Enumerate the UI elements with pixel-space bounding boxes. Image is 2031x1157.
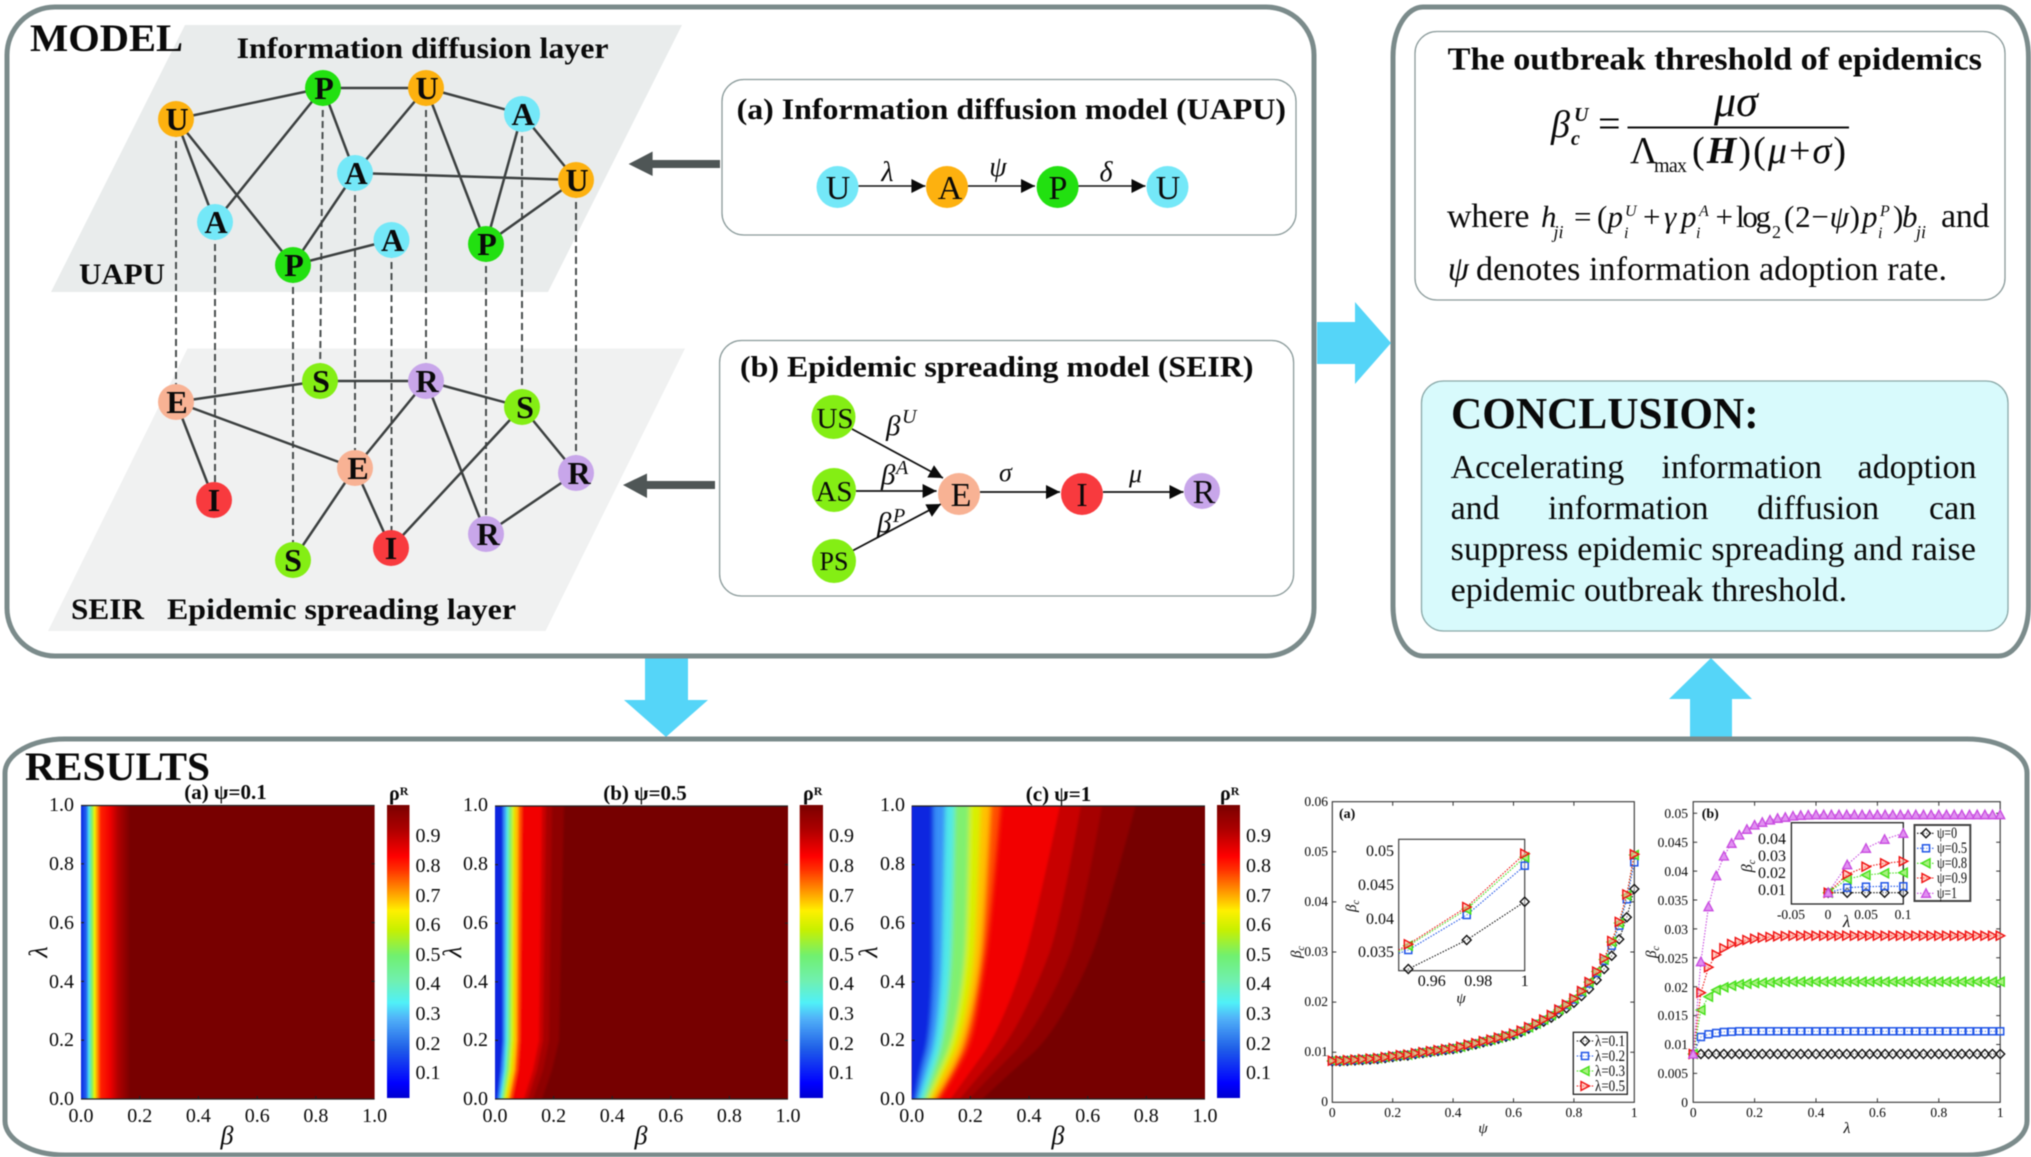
inset chart: lambda 0 to 0.1: 0.05 bbox=[1854, 907, 1878, 922]
where line: p bbox=[1679, 199, 1696, 234]
colorbar: psi 0.1: 0.1 bbox=[416, 1062, 440, 1084]
nodes: epidemic layer: S bbox=[284, 542, 302, 578]
box: UAPU model bbox=[722, 80, 1296, 235]
where line: p bbox=[1606, 199, 1623, 234]
heading: information diffusion layer: Information diffusion layer bbox=[237, 32, 609, 65]
series: psi 0.5 bbox=[1693, 1031, 2000, 1054]
colorbar: psi 0.1: R bbox=[400, 784, 409, 798]
heatmap: psi 0.1: 0.6 bbox=[49, 912, 74, 934]
inset chart: lambda 0 to 0.1: 0.03 bbox=[1758, 848, 1786, 865]
inset chart: psi 0.95 to 1: ψ bbox=[1456, 991, 1466, 1007]
colorbar: psi 0.5: 0.6 bbox=[829, 914, 854, 936]
conclusion body: suppress epidemic spreading and raise bbox=[1451, 531, 1976, 568]
colorbar: psi 1: 0.4 bbox=[1246, 973, 1271, 995]
line chart: threshold vs lambda: 0.2 bbox=[1746, 1105, 1763, 1120]
where line: p bbox=[1860, 199, 1878, 234]
SEIR state diagram bbox=[812, 395, 1220, 583]
colorbar: psi 0.5: 0.2 bbox=[829, 1033, 854, 1055]
SEIR state diagram: A bbox=[894, 457, 909, 479]
inset chart: psi 0.95 to 1: 1 bbox=[1521, 973, 1529, 990]
SEIR state diagram: AS bbox=[815, 476, 853, 508]
where line: 2 bbox=[1772, 222, 1781, 242]
line chart: threshold vs lambda: 0.015 bbox=[1658, 1008, 1688, 1023]
where line: ji bbox=[1552, 222, 1564, 242]
heatmap: psi 1: 0.2 bbox=[880, 1029, 905, 1051]
conclusion body: information bbox=[1662, 449, 1822, 486]
heatmap: psi 1: (c) ψ=1 bbox=[1026, 782, 1091, 806]
heatmap: psi 1: 0.4 bbox=[880, 971, 905, 993]
legend: psi series: ψ=0.9 bbox=[1937, 870, 1967, 887]
nodes: information layer: A bbox=[204, 204, 228, 240]
panel: results bbox=[5, 739, 2027, 1155]
colorbar: psi 1 bbox=[1217, 783, 1271, 1098]
where line: = bbox=[1574, 199, 1591, 234]
line chart: threshold vs lambda: 0.01 bbox=[1664, 1037, 1688, 1052]
SEIR state diagram: β bbox=[880, 459, 896, 491]
colorbar: psi 0.1: 0.5 bbox=[416, 944, 440, 966]
UAPU state diagram: δ bbox=[1099, 157, 1113, 188]
threshold formula: Λ bbox=[1630, 130, 1658, 172]
inset chart: psi 0.95 to 1 bbox=[1344, 839, 1529, 1007]
heatmap: psi 0.5: 0.6 bbox=[463, 912, 488, 934]
heatmap: psi 0.5: 0.8 bbox=[463, 853, 488, 875]
colorbar: psi 1: 0.2 bbox=[1246, 1033, 1271, 1055]
heatmap: psi 1: 0.6 bbox=[880, 912, 905, 934]
nodes: epidemic layer: R bbox=[415, 363, 439, 399]
inset chart: lambda 0 to 0.1: β bbox=[1739, 864, 1756, 872]
heatmap: psi 0.1: 0.0 bbox=[68, 1105, 94, 1127]
heatmap: psi 1: λ bbox=[854, 946, 883, 959]
UAPU state diagram bbox=[816, 152, 1188, 208]
UAPU state diagram: A bbox=[938, 170, 963, 207]
heatmap: psi 0.1: 1.0 bbox=[362, 1105, 387, 1127]
psi definition: ψ bbox=[1448, 251, 1470, 288]
nodes: epidemic layer: R bbox=[476, 516, 500, 552]
conclusion body: epidemic outbreak threshold. bbox=[1451, 572, 1847, 609]
inset chart: lambda 0 to 0.1: 0.02 bbox=[1758, 865, 1786, 882]
line chart: threshold vs psi: 0 bbox=[1321, 1094, 1328, 1109]
line chart: threshold vs lambda: 0.04 bbox=[1664, 864, 1688, 879]
line chart: threshold vs psi: 0.03 bbox=[1304, 944, 1328, 959]
nodes: information layer: P bbox=[284, 247, 304, 283]
heatmap: psi 0.5: 0.4 bbox=[600, 1105, 625, 1127]
colorbar: psi 0.1: 0.3 bbox=[416, 1003, 440, 1025]
line chart: threshold vs lambda: c bbox=[1651, 945, 1662, 950]
SEIR state diagram: U bbox=[902, 406, 918, 428]
heading: results: RESULTS bbox=[25, 744, 210, 789]
inset chart: lambda 0 to 0.1 bbox=[1739, 823, 1911, 931]
legend: lambda series: λ=0.5 bbox=[1595, 1078, 1625, 1095]
threshold formula: β bbox=[1550, 104, 1570, 146]
series: psi 1 bbox=[1693, 815, 2000, 1054]
heatmap: psi 0.5: 0.4 bbox=[463, 971, 488, 993]
line chart: threshold vs psi: 0.2 bbox=[1384, 1105, 1401, 1120]
colorbar: psi 1: 0.3 bbox=[1246, 1003, 1271, 1025]
colorbar: psi 1: 0.5 bbox=[1246, 944, 1271, 966]
line chart: threshold vs lambda: 0.025 bbox=[1658, 951, 1688, 966]
heading: model: MODEL bbox=[30, 17, 183, 60]
heatmap: psi 1: 0.2 bbox=[958, 1105, 983, 1127]
inset chart: lambda 0 to 0.1: 0.1 bbox=[1895, 907, 1911, 922]
threshold heading: The outbreak threshold of epidemics bbox=[1448, 40, 1982, 76]
colorbar: psi 0.5: ρ bbox=[803, 783, 814, 805]
label: SEIR: SEIR bbox=[71, 593, 144, 626]
SEIR state diagram: β bbox=[885, 410, 901, 442]
colorbar: psi 0.1: 0.8 bbox=[416, 855, 440, 877]
panel: threshold and conclusion bbox=[1393, 7, 2028, 656]
series: lambda 0.5 bbox=[1332, 854, 1634, 1061]
where line: A bbox=[1698, 203, 1709, 220]
line chart: threshold vs psi: 0.05 bbox=[1304, 844, 1328, 859]
heatmap: psi 0.1: 0.4 bbox=[49, 971, 74, 993]
UAPU state diagram: U bbox=[1156, 170, 1180, 207]
nodes: information layer: A bbox=[511, 96, 535, 132]
line chart: threshold vs lambda bbox=[1644, 802, 2004, 1137]
arrow: SEIR model to layer bbox=[623, 474, 715, 498]
nodes: information layer: A bbox=[381, 222, 404, 258]
where line: i bbox=[1878, 225, 1882, 242]
where line: (2−ψ) bbox=[1784, 199, 1860, 234]
heatmap: psi 0.1: 0.6 bbox=[245, 1105, 270, 1127]
line chart: threshold vs psi: 0.01 bbox=[1304, 1044, 1328, 1059]
where line: + bbox=[1716, 199, 1733, 234]
colorbar: psi 0.5: 0.9 bbox=[829, 825, 854, 847]
nodes: epidemic layer: E bbox=[166, 384, 188, 420]
legend: lambda series: λ=0.2 bbox=[1595, 1048, 1625, 1065]
heatmap: psi 0.1 bbox=[24, 780, 387, 1150]
SEIR state diagram: PS bbox=[820, 547, 848, 576]
line chart: threshold vs lambda: 0.03 bbox=[1664, 922, 1688, 937]
box heading: (b) Epidemic spreading model (SEIR) bbox=[740, 351, 1254, 384]
line chart: threshold vs lambda: 0.035 bbox=[1658, 893, 1688, 908]
nodes: information layer bbox=[158, 70, 594, 283]
heatmap: psi 0.1: (a) ψ=0.1 bbox=[184, 780, 267, 804]
heatmap: psi 1: 0.0 bbox=[880, 1088, 905, 1110]
conclusion body: and bbox=[1451, 490, 1500, 527]
conclusion body: diffusion bbox=[1757, 490, 1879, 527]
threshold formula: max bbox=[1654, 155, 1687, 177]
line chart: threshold vs psi: 0 bbox=[1329, 1105, 1336, 1120]
line chart: threshold vs psi: 0.02 bbox=[1304, 994, 1328, 1009]
threshold formula: μσ bbox=[1713, 77, 1760, 126]
threshold formula: U bbox=[1574, 104, 1590, 126]
inset chart: psi 0.95 to 1: 0.05 bbox=[1366, 843, 1394, 860]
heatmap: psi 1: 0.8 bbox=[1134, 1105, 1159, 1127]
colorbar: psi 0.1: 0.2 bbox=[416, 1033, 440, 1055]
conclusion body: can bbox=[1929, 490, 1976, 527]
heading: epidemic spreading layer: Epidemic spreading layer bbox=[167, 593, 516, 626]
colorbar: psi 0.1 bbox=[387, 783, 440, 1098]
line chart: threshold vs psi: β bbox=[1289, 950, 1305, 958]
line chart: threshold vs lambda: 0.4 bbox=[1808, 1105, 1825, 1120]
UAPU state diagram: U bbox=[826, 170, 850, 207]
line chart: threshold vs lambda: 1 bbox=[1997, 1105, 2004, 1120]
UAPU state diagram: λ bbox=[880, 157, 894, 188]
line chart: threshold vs psi: c bbox=[1296, 945, 1307, 950]
box: conclusion bbox=[1422, 381, 2008, 631]
line chart: threshold vs lambda: 0.02 bbox=[1664, 980, 1688, 995]
series: lambda 0.3 bbox=[1332, 855, 1634, 1061]
where line: and bbox=[1941, 198, 1990, 235]
where line: ) bbox=[1893, 199, 1903, 234]
threshold formula: = bbox=[1598, 101, 1621, 146]
line chart: threshold vs lambda: 0.8 bbox=[1930, 1105, 1947, 1120]
UAPU state diagram: P bbox=[1049, 170, 1067, 207]
SEIR state diagram: P bbox=[892, 505, 905, 527]
colorbar: psi 0.1: ρ bbox=[389, 783, 400, 805]
colorbar: psi 1: 0.8 bbox=[1246, 855, 1271, 877]
line chart: threshold vs lambda: β bbox=[1644, 950, 1660, 958]
nodes: epidemic layer: I bbox=[385, 530, 397, 566]
line chart: threshold vs lambda: 0 bbox=[1681, 1095, 1688, 1110]
heatmap: psi 0.5: 1.0 bbox=[776, 1105, 800, 1127]
arrow: UAPU model to layer bbox=[629, 152, 720, 176]
line chart: threshold vs psi: 1 bbox=[1631, 1105, 1638, 1120]
where line: U bbox=[1625, 203, 1638, 220]
series: lambda 0.1 bbox=[1332, 889, 1634, 1061]
colorbar: psi 0.1: 0.6 bbox=[416, 914, 440, 936]
conclusion body: information bbox=[1548, 490, 1709, 527]
legend: psi series: ψ=0 bbox=[1937, 825, 1957, 842]
heatmap: psi 0.5: 0.6 bbox=[658, 1105, 683, 1127]
line chart: threshold vs psi: 0.06 bbox=[1304, 794, 1328, 809]
label: UAPU: UAPU bbox=[79, 258, 165, 291]
nodes: epidemic layer: I bbox=[208, 482, 220, 518]
heatmap: psi 0.5: 0.0 bbox=[463, 1088, 488, 1110]
heatmap: psi 1: 0.8 bbox=[880, 853, 905, 875]
series: psi 0.9 bbox=[1693, 936, 2000, 1054]
inset chart: psi 0.95 to 1: 0.045 bbox=[1358, 877, 1394, 894]
colorbar: psi 0.5: 0.8 bbox=[829, 855, 854, 877]
nodes: epidemic layer: S bbox=[516, 389, 534, 425]
colorbar: psi 1: 0.7 bbox=[1246, 885, 1271, 907]
box heading: (a) Information diffusion model (UAPU) bbox=[737, 93, 1286, 126]
line chart: threshold vs psi: 0.6 bbox=[1505, 1105, 1522, 1120]
where line bbox=[1447, 198, 1990, 242]
line chart: threshold vs lambda: 0.05 bbox=[1664, 806, 1688, 821]
colorbar: psi 0.1: 0.4 bbox=[416, 973, 440, 995]
where line: log bbox=[1736, 199, 1771, 234]
upper layer plane bbox=[51, 25, 682, 292]
box: outbreak threshold bbox=[1415, 32, 2005, 300]
series: psi 0.8 bbox=[1693, 982, 2000, 1054]
colorbar: psi 0.5 bbox=[800, 783, 854, 1098]
colorbar: psi 1: 0.6 bbox=[1246, 914, 1271, 936]
heatmap: psi 1: 0.6 bbox=[1075, 1105, 1100, 1127]
inset chart: psi 0.95 to 1: 0.04 bbox=[1366, 911, 1394, 928]
nodes: information layer: U bbox=[165, 101, 189, 137]
SEIR state diagram: I bbox=[1076, 477, 1088, 514]
inset chart: psi 0.95 to 1: 0.96 bbox=[1418, 973, 1446, 990]
heatmap: psi 0.5: β bbox=[634, 1121, 648, 1150]
network edges: information layer bbox=[176, 88, 576, 265]
interlayer dashed links bbox=[176, 88, 576, 560]
nodes: information layer: P bbox=[314, 70, 334, 106]
where line: where bbox=[1447, 198, 1530, 235]
heatmap: psi 1 bbox=[854, 782, 1218, 1150]
where line: h bbox=[1541, 199, 1556, 234]
threshold formula: (H)(μ+σ) bbox=[1692, 130, 1846, 172]
inset chart: psi 0.95 to 1: 0.035 bbox=[1358, 944, 1394, 961]
line chart: threshold vs lambda: (b) bbox=[1702, 807, 1719, 822]
inset chart: psi 0.95 to 1: c bbox=[1351, 899, 1362, 904]
psi definition: denotes information adoption rate. bbox=[1476, 251, 1947, 288]
legend: psi series bbox=[1914, 825, 1970, 902]
nodes: information layer: U bbox=[415, 70, 439, 106]
colorbar: psi 0.1: 0.7 bbox=[416, 885, 440, 907]
nodes: information layer: A bbox=[344, 155, 368, 191]
legend: lambda series: λ=0.1 bbox=[1595, 1033, 1625, 1050]
blue arrow: model to threshold bbox=[1317, 302, 1391, 384]
inset chart: lambda 0 to 0.1: 0.01 bbox=[1758, 882, 1786, 899]
where line: i bbox=[1696, 225, 1700, 242]
line chart: threshold vs psi: 0.4 bbox=[1445, 1105, 1462, 1120]
conclusion body: adoption bbox=[1858, 449, 1976, 486]
inset chart: lambda 0 to 0.1: λ bbox=[1842, 912, 1850, 931]
heatmap: psi 0.5: 0.2 bbox=[541, 1105, 566, 1127]
heatmap: psi 1: 1.0 bbox=[1192, 1105, 1218, 1127]
line chart: threshold vs lambda: 0 bbox=[1690, 1105, 1697, 1120]
threshold formula: c bbox=[1571, 128, 1580, 150]
series: psi 0 bbox=[1693, 1053, 2000, 1055]
legend: lambda series: λ=0.3 bbox=[1595, 1063, 1625, 1080]
colorbar: psi 0.5: 0.5 bbox=[829, 944, 854, 966]
inset chart: lambda 0 to 0.1: c bbox=[1747, 859, 1758, 864]
legend: psi series: ψ=0.5 bbox=[1937, 840, 1967, 857]
colorbar: psi 0.5: R bbox=[814, 784, 823, 798]
colorbar: psi 1: R bbox=[1231, 784, 1240, 798]
heatmap: psi 0.5: 1.0 bbox=[463, 794, 488, 816]
where line: P bbox=[1879, 203, 1890, 220]
legend: psi series: ψ=0.8 bbox=[1937, 855, 1967, 872]
SEIR state diagram: β bbox=[876, 507, 892, 539]
where line: ji bbox=[1914, 222, 1926, 242]
nodes: epidemic layer: S bbox=[312, 363, 330, 399]
nodes: information layer: U bbox=[565, 162, 589, 198]
heatmap: psi 0.5: (b) ψ=0.5 bbox=[603, 781, 687, 805]
inset chart: lambda 0 to 0.1: 0 bbox=[1825, 907, 1832, 922]
heatmap: psi 0.5: 0.8 bbox=[717, 1105, 742, 1127]
heatmap: psi 1: 1.0 bbox=[880, 794, 905, 816]
SEIR state diagram: US bbox=[816, 403, 854, 435]
panel: model bbox=[7, 7, 1314, 656]
network edges: epidemic layer bbox=[176, 381, 576, 560]
conclusion heading: CONCLUSION: bbox=[1451, 389, 1759, 438]
where line: i bbox=[1624, 225, 1628, 242]
where line: + bbox=[1643, 199, 1660, 234]
UAPU state diagram: ψ bbox=[989, 152, 1007, 183]
heatmap: psi 0.5: 0.0 bbox=[482, 1105, 508, 1127]
heatmap: psi 0.5: λ bbox=[438, 946, 467, 959]
colorbar: psi 0.5: 0.1 bbox=[829, 1062, 854, 1084]
line chart: threshold vs psi: ψ bbox=[1478, 1121, 1488, 1137]
lower layer plane bbox=[48, 348, 685, 631]
heatmap: psi 0.1: 0.0 bbox=[49, 1088, 74, 1110]
SEIR state diagram: μ bbox=[1128, 459, 1142, 488]
inset chart: psi 0.95 to 1: β bbox=[1344, 904, 1360, 912]
colorbar: psi 1: 0.1 bbox=[1246, 1062, 1271, 1084]
heatmap: psi 0.1: 0.4 bbox=[186, 1105, 211, 1127]
SEIR state diagram: σ bbox=[999, 458, 1013, 487]
colorbar: psi 1: ρ bbox=[1220, 783, 1231, 805]
nodes: epidemic layer: E bbox=[347, 450, 369, 486]
SEIR state diagram: R bbox=[1193, 474, 1216, 511]
heatmap: psi 0.1: 0.8 bbox=[49, 853, 74, 875]
heatmap: psi 0.1: 0.8 bbox=[303, 1105, 328, 1127]
threshold formula bbox=[1550, 77, 1849, 177]
where line: γ bbox=[1664, 199, 1677, 234]
colorbar: psi 0.1: 0.9 bbox=[416, 825, 440, 847]
nodes: epidemic layer bbox=[158, 363, 594, 578]
line chart: threshold vs psi: 0.04 bbox=[1304, 894, 1328, 909]
blue arrow: results to conclusion bbox=[1669, 658, 1752, 745]
SEIR state diagram: E bbox=[951, 477, 971, 514]
where line: b bbox=[1902, 199, 1918, 234]
heatmap: psi 0.1: β bbox=[220, 1121, 234, 1150]
heatmap: psi 0.1: 1.0 bbox=[49, 794, 74, 816]
heatmap: psi 1: 0.4 bbox=[1016, 1105, 1042, 1127]
line chart: threshold vs psi: 0.8 bbox=[1565, 1105, 1583, 1120]
heatmap: psi 0.5: 0.2 bbox=[463, 1029, 488, 1051]
heatmap: psi 0.1: 0.2 bbox=[49, 1029, 74, 1051]
series: lambda 0.2 bbox=[1332, 862, 1634, 1061]
colorbar: psi 0.5: 0.3 bbox=[829, 1003, 854, 1025]
nodes: epidemic layer: R bbox=[567, 455, 591, 491]
blue arrow: model to results bbox=[624, 650, 708, 737]
line chart: threshold vs psi: (a) bbox=[1339, 807, 1356, 822]
heatmap: psi 0.1: λ bbox=[24, 946, 53, 959]
conclusion body: Accelerating bbox=[1451, 449, 1624, 486]
inset chart: psi 0.95 to 1: 0.98 bbox=[1464, 973, 1492, 990]
colorbar: psi 0.5: 0.7 bbox=[829, 885, 854, 907]
line chart: threshold vs lambda: λ bbox=[1843, 1120, 1851, 1137]
legend: lambda series bbox=[1573, 1032, 1627, 1095]
colorbar: psi 0.5: 0.4 bbox=[829, 973, 854, 995]
heatmap: psi 1: β bbox=[1051, 1121, 1065, 1150]
line chart: threshold vs lambda: 0.005 bbox=[1658, 1066, 1688, 1081]
box: SEIR model bbox=[720, 340, 1294, 596]
conclusion body bbox=[1451, 449, 1976, 609]
inset chart: lambda 0 to 0.1: -0.05 bbox=[1777, 907, 1805, 922]
heatmap: psi 0.5 bbox=[438, 781, 800, 1150]
where line: ( bbox=[1597, 199, 1607, 234]
line chart: threshold vs psi bbox=[1289, 794, 1638, 1137]
legend: psi series: ψ=1 bbox=[1937, 885, 1957, 902]
colorbar: psi 1: 0.9 bbox=[1246, 825, 1271, 847]
inset chart: lambda 0 to 0.1: 0.04 bbox=[1758, 831, 1786, 848]
line chart: threshold vs lambda: 0.045 bbox=[1658, 835, 1688, 850]
line chart: threshold vs lambda: 0.6 bbox=[1869, 1105, 1886, 1120]
heatmap: psi 0.1: 0.2 bbox=[127, 1105, 152, 1127]
heatmap: psi 1: 0.0 bbox=[899, 1105, 924, 1127]
nodes: information layer: P bbox=[477, 226, 497, 262]
